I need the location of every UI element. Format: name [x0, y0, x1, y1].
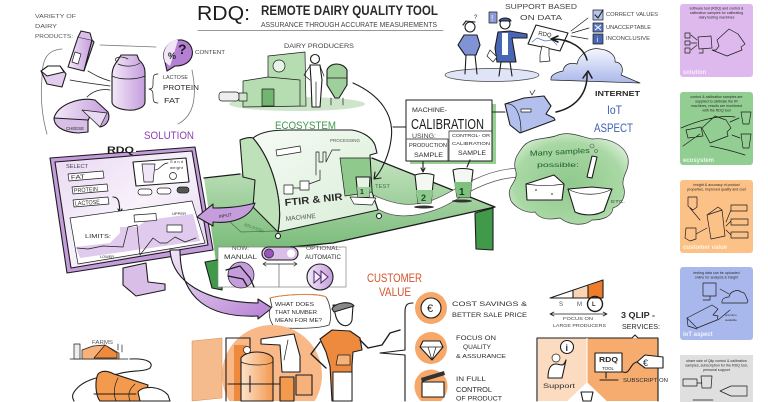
card: solution: solution: [683, 70, 707, 76]
panel: dairy products: FAT: [164, 98, 181, 105]
icon: RDQ tool monitor: [595, 353, 622, 380]
panel: machine calibration: USING:: [412, 134, 436, 140]
panel: manual or automatic: OPTIONAL:: [306, 246, 341, 252]
checklist: UNACCEPTABLE: [606, 25, 651, 31]
icon: sample cup: [581, 392, 593, 401]
panel: manual or automatic: NOW:: [232, 246, 249, 252]
chart: producer size wedge: LARGE PRODUCERS: [553, 323, 606, 328]
chart: producer size wedge: M: [577, 302, 582, 308]
machine: FTIR and NIR: PROCESSING: [330, 138, 360, 143]
icon: internet cloud: [551, 49, 640, 83]
card: solution: dairy testing machines: [699, 16, 735, 20]
card: services: share sale of Qlip control & calibration: [686, 359, 747, 363]
icon: iot device: [505, 90, 555, 133]
icon: producer figure: [304, 54, 324, 107]
chart: producer size wedge: [550, 280, 607, 328]
panel: machine calibration: SAMPLE: [414, 152, 444, 159]
panel: machine calibration: CALIBRATION: [452, 141, 490, 146]
icon: clapperboard: [414, 370, 448, 401]
arrow: input: [197, 203, 255, 226]
toggle switch: [262, 247, 298, 260]
machine: FTIR and NIR: FTIR & NIR: [284, 192, 344, 209]
panel: machine calibration: CONTROL- OR: [452, 133, 491, 138]
panel: farms: [70, 340, 170, 401]
icon: test tube: [587, 156, 597, 178]
icon: milk carton: [68, 31, 94, 71]
figure: customer: [311, 303, 400, 401]
icon: RDQ tool monitor: TOOL: [602, 366, 614, 371]
panel: dairy products: PRODUCTS:: [35, 34, 74, 40]
chart: producer size wedge: L: [592, 302, 596, 308]
icon: milk truck: [219, 92, 247, 101]
card: ecosystem: [680, 92, 753, 165]
icon: yogurt cup: [41, 66, 66, 87]
label: into system: [230, 222, 276, 234]
panel: support based on data: [445, 2, 658, 82]
panel: sample cloud: possible:: [537, 163, 580, 169]
icon: euro coin: [415, 292, 447, 324]
panel: support based on data: ON DATA: [520, 13, 562, 22]
arrow: cloud to monitor: [551, 36, 587, 60]
checklist: CORRECT VALUES: [606, 12, 658, 18]
panel: farms: FARMS: [92, 340, 113, 346]
heading: 3 Qlip services: 3 QLIP -: [621, 311, 655, 320]
heading: ecosystem: ECOSYSTEM: [275, 120, 336, 132]
checklist: [593, 10, 658, 44]
icon: factory building: [243, 52, 306, 107]
card: iot aspect: online for analysis & insight: [695, 276, 738, 280]
panel: services: Support: [543, 383, 575, 390]
heading: customer value: CUSTOMER: [367, 271, 422, 285]
panel: machine calibration: PRODUCTION: [409, 143, 447, 149]
panel: customer value list: QUALITY: [463, 344, 492, 351]
icon: cup 2: 2: [421, 193, 426, 203]
sample box: weight: [170, 165, 184, 170]
card: ecosystem: with the RDQ tool: [702, 108, 731, 112]
heading: customer value: [367, 271, 422, 299]
label: internet: INTERNET: [595, 89, 641, 98]
panel: machine calibration: CALIBRATION: [411, 116, 484, 133]
icon: small vessels: [280, 375, 312, 401]
icon: cup 2: [414, 174, 434, 208]
icon: content bubble: %: [168, 51, 176, 61]
panel: manual or automatic: [218, 246, 346, 290]
line chart: LIMITS:: [85, 234, 112, 240]
title: [197, 3, 443, 30]
machine: FTIR and NIR: TEST: [375, 184, 390, 190]
card: services: samples, subscription for the RDQ tool,: [685, 364, 748, 368]
panel: manual or automatic: AUTOMATIC: [305, 255, 342, 261]
icon: test cup: [350, 177, 376, 205]
card: customer value: customer value: [683, 245, 728, 251]
icon: cheese wheel: CHEESE: [66, 126, 84, 131]
icon: data monitor: RDQ: [538, 31, 552, 39]
dropdowns: LACTOSE: [75, 200, 100, 207]
panel: customer value list: & ASSURANCE: [456, 354, 506, 360]
checklist: INCONCLUSIVE: [606, 36, 650, 42]
dropdowns: [68, 171, 109, 207]
card: ecosystem: control & calibration samples are: [690, 95, 743, 99]
dropdowns: PROTEIN: [74, 187, 98, 194]
panel: ecosystem factory: [219, 43, 365, 111]
icon: fast forward: [307, 264, 333, 290]
monitor: RDQ software: SELECT: [66, 164, 89, 170]
panel: dairy products: [35, 14, 226, 134]
arrow: device to cloud: [556, 71, 592, 112]
title: RDQ:: [197, 3, 250, 25]
card: iot aspect: testing data can be uploaded: [693, 271, 740, 275]
panel: sample cloud: ETC.: [611, 199, 625, 204]
icon: test cup: 1: [360, 189, 364, 196]
panel: customer value list: [380, 292, 528, 402]
heading: iot aspect: [594, 103, 634, 135]
icon: monitor stand: [123, 263, 165, 296]
card: customer value: insight & accuracy of product: [693, 183, 740, 187]
icon: manual hand: [226, 262, 254, 288]
icon: cup 1: 1: [459, 187, 465, 198]
conveyor belt: [373, 168, 522, 216]
icon: bubbles: [590, 144, 598, 152]
card: iot aspect: premium: [725, 313, 737, 317]
icon: exclamation square: [489, 12, 497, 23]
icon: person with question: ?: [474, 15, 478, 21]
heading: iot aspect: IoT: [607, 103, 623, 117]
speech bubble: WHAT DOES: [275, 302, 314, 308]
arrow: producers to test: [353, 83, 392, 179]
icon: exclamation square: !: [491, 14, 493, 23]
heading: customer value: VALUE: [379, 285, 411, 299]
chart: producer size wedge: FOCUS ON: [563, 316, 593, 321]
title: REMOTE DAIRY QUALITY TOOL: [261, 3, 438, 18]
icon: support person: i: [566, 343, 568, 353]
panel: dairy products: PROTEIN: [163, 85, 199, 92]
line chart: UPPER: [172, 211, 186, 216]
icon: cup 1: [452, 168, 473, 202]
icon: fridge unit: [261, 334, 300, 372]
icon: person with question: [458, 15, 480, 74]
card: iot aspect: available: [725, 318, 737, 322]
heading: 3 Qlip services: SERVICES:: [622, 324, 660, 331]
heading: solution: SOLUTION: [144, 130, 194, 142]
panel: services: SUBSCRIPTION: [623, 378, 668, 384]
heading: 3 Qlip services: [621, 311, 660, 331]
line chart: LOWER: [100, 254, 114, 259]
card: customer value: [680, 180, 753, 253]
card: iot aspect: IoT aspect: [683, 332, 713, 338]
label: into system: INTO SYSTEM: [244, 222, 264, 234]
card: solution: software tool (RDQ) and control &: [690, 6, 744, 10]
panel: sample cloud: Many samples: [530, 146, 590, 158]
icon: cheese block: [526, 175, 564, 200]
icon: content bubble: [164, 40, 192, 71]
panel: customer value list: CONTROL: [456, 387, 492, 394]
icon: steel tank: [228, 346, 290, 401]
panel: ecosystem factory: DAIRY PRODUCERS: [284, 43, 355, 50]
icon: data monitor: [528, 25, 568, 62]
icon: milk jug: [112, 55, 145, 110]
monitor: RDQ software: [50, 140, 213, 296]
icon: person in lab coat: [487, 18, 527, 76]
panel: sample cloud: [509, 134, 628, 224]
icon: euro price tag: €: [643, 358, 648, 368]
panel: factory scene: [192, 325, 322, 401]
icon: content bubble: ?: [178, 41, 187, 57]
sample box: Sand: [170, 159, 183, 164]
card: ecosystem: supplied to calibrate the IR: [695, 100, 738, 104]
icon: cheese wheel: [54, 99, 109, 133]
card: iot aspect: [680, 267, 753, 340]
toggles: [138, 187, 189, 195]
chart: producer size wedge: S: [559, 302, 563, 308]
panel: customer value list: IN FULL: [456, 376, 486, 383]
panel: dairy products: DAIRY: [35, 24, 57, 30]
line chart: [70, 201, 205, 264]
icon: sample tub: [568, 187, 612, 215]
panel: services: [537, 335, 668, 401]
panel: machine calibration: SAMPLE: [458, 150, 487, 157]
card: solution: [680, 4, 753, 77]
panel: customer value list: COST SAVINGS &: [452, 301, 528, 308]
panel: customer value list: BETTER SALE PRICE: [452, 312, 528, 319]
dropdowns: FAT: [71, 175, 86, 181]
panel: dairy products: VARIETY OF: [35, 14, 77, 20]
monitor: RDQ software: RDQ: [107, 145, 134, 155]
panel: machine calibration: [406, 100, 496, 164]
panel: customer value list: FOCUS ON: [456, 335, 496, 342]
card: ecosystem: ecosystem: [683, 158, 714, 164]
card: services: [680, 355, 753, 402]
machine: FTIR and NIR: [240, 130, 390, 238]
arrow: big purple: [170, 250, 272, 319]
speech bubble: MEAN FOR ME?: [275, 318, 322, 324]
card: solution: calibration samples for calibrating: [690, 11, 743, 15]
card: ecosystem: machines, results are monitored: [691, 104, 742, 108]
speech bubble: [269, 294, 331, 328]
panel: dairy products: CONTENT: [195, 50, 226, 56]
table: [204, 158, 495, 290]
speech bubble: THAT NUMBER: [275, 310, 317, 316]
card: services: personal support: [703, 368, 730, 372]
panel: support based on data: SUPPORT BASED: [505, 2, 578, 11]
icon: RDQ tool monitor: RDQ: [599, 357, 619, 364]
title: ASSURANCE THROUGH ACCURATE MEASUREMENTS: [261, 22, 437, 29]
icon: milk tanker: [94, 371, 170, 401]
icon: diamond: [415, 332, 447, 364]
sample box: [133, 158, 189, 186]
heading: iot aspect: ASPECT: [594, 121, 634, 135]
panel: dairy products: LACTOSE: [163, 75, 188, 81]
arrow: input: INPUT: [218, 212, 232, 219]
icon: euro coin: €: [427, 303, 433, 315]
card: customer value: properties, improved quality and cost: [687, 188, 746, 192]
panel: manual or automatic: MANUAL: [224, 254, 257, 261]
panel: machine calibration: MACHINE-: [412, 107, 447, 114]
machine: FTIR and NIR: MACHINE: [285, 213, 317, 223]
icon: silo: [327, 64, 347, 105]
checklist: i: [596, 37, 598, 44]
